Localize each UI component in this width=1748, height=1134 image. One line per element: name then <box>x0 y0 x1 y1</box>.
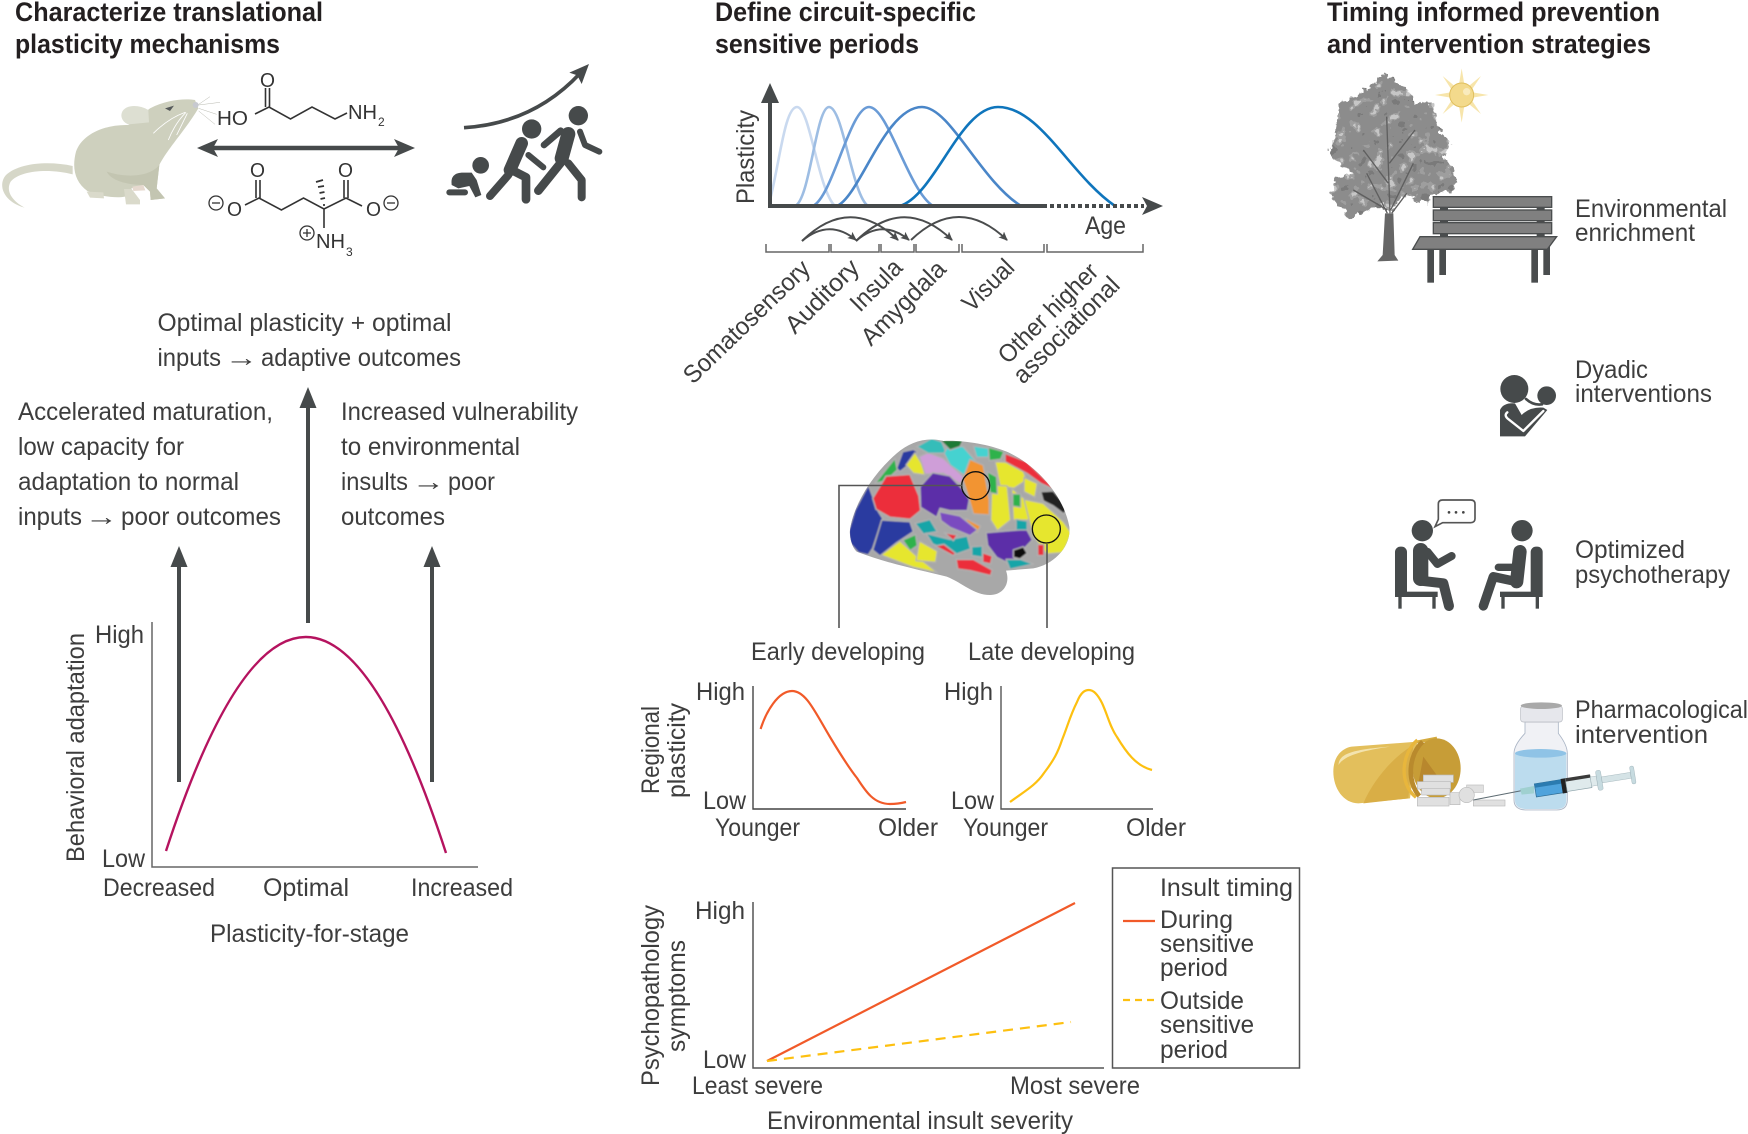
molecule: glutamate analogue: O <box>227 199 242 221</box>
molecule: glutamate analogue: 3 <box>346 245 353 259</box>
text: increased vulnerability outcome: to environmental <box>341 433 520 461</box>
chart: early developing regional plasticity <box>637 678 938 842</box>
heading: define circuit-specific sensitive periods <box>715 0 976 59</box>
text: optimal plasticity outcome <box>158 309 461 372</box>
heading: characterize translational plasticity mechanisms <box>15 0 323 59</box>
text: accelerated maturation outcome <box>18 398 281 531</box>
heading: characterize translational plasticity mechanisms: plasticity mechanisms <box>15 29 280 59</box>
legend: insult timing: period <box>1160 954 1228 982</box>
labels: brain regions: associational <box>1007 271 1126 389</box>
chart: late developing regional plasticity: Older <box>1126 814 1186 842</box>
text: increased vulnerability outcome: poor <box>448 468 495 496</box>
label: dyadic interventions: interventions <box>1575 380 1712 408</box>
chart: behavioral adaptation inverted U: Optimal <box>263 874 349 902</box>
label: late developing: Late developing <box>968 638 1135 666</box>
chart: behavioral adaptation inverted U: Decreased <box>103 874 215 902</box>
text: increased vulnerability outcome: insults <box>341 468 408 496</box>
molecule: glutamate analogue: O <box>366 199 381 221</box>
chart: psychopathology vs insult severity: High <box>695 897 745 925</box>
leader lines: early and late regions <box>839 486 1047 628</box>
chart: behavioral adaptation inverted U: Plasticity-for-stage <box>210 920 409 948</box>
molecule: GABA: 2 <box>378 115 385 129</box>
icon: mouse <box>2 97 220 208</box>
text: optimal plasticity outcome: inputs <box>158 344 221 372</box>
chart: plasticity curves by age <box>732 83 1163 240</box>
text: optimal plasticity outcome: Optimal plasticity + optimal <box>158 309 452 337</box>
labels: brain regions <box>678 253 1126 389</box>
chart: psychopathology vs insult severity: Psychopathology <box>637 905 665 1086</box>
chart: early developing regional plasticity: Regional <box>637 706 665 794</box>
chart: plasticity curves by age: Age <box>1085 212 1126 240</box>
text: accelerated maturation outcome: low capacity for <box>18 433 184 461</box>
chart: early developing regional plasticity: Younger <box>715 814 800 842</box>
labels: brain regions: Visual <box>956 254 1020 317</box>
brackets: region spans <box>766 244 1143 252</box>
chart: behavioral adaptation inverted U: Low <box>102 845 146 873</box>
labels: brain regions: Amygdala <box>855 255 952 351</box>
labels: brain regions: Other higher <box>992 258 1104 369</box>
arrows: maturation sequence <box>802 217 1007 241</box>
text: accelerated maturation outcome: adaptation to normal <box>18 468 239 496</box>
icon: pills, vial and syringe <box>1333 702 1636 810</box>
chart: late developing regional plasticity: Younger <box>963 814 1048 842</box>
text: increased vulnerability outcome: outcomes <box>341 503 445 531</box>
legend: insult timing: Insult timing <box>1160 874 1293 902</box>
arrow: centre upward <box>300 387 316 623</box>
heading: timing informed prevention and intervention strategies: and intervention strategies <box>1327 29 1651 59</box>
text: accelerated maturation outcome: poor outcomes <box>121 503 281 531</box>
chart: early developing regional plasticity: Low <box>703 787 747 815</box>
label: pharmacological intervention: intervention <box>1575 721 1708 749</box>
arrow: right upward <box>424 546 440 782</box>
chart: late developing regional plasticity: High <box>944 678 993 706</box>
panel: timing informed strategies <box>1327 0 1748 810</box>
panel: translational plasticity mechanisms <box>2 0 599 948</box>
molecule: glutamate analogue <box>209 160 398 259</box>
labels: brain regions: Insula <box>844 254 908 317</box>
legend: insult timing: sensitive <box>1160 930 1254 958</box>
text: increased vulnerability outcome: → <box>412 468 445 496</box>
chart: psychopathology vs insult severity <box>637 897 1140 1134</box>
legend: insult timing: sensitive <box>1160 1011 1254 1039</box>
chart: late developing regional plasticity: Low <box>951 787 995 815</box>
label: dyadic interventions: Dyadic <box>1575 356 1648 384</box>
legend: insult timing: During <box>1160 906 1233 934</box>
panel: circuit-specific sensitive periods <box>637 0 1300 1134</box>
labels: brain regions: Auditory <box>779 253 865 339</box>
molecule: glutamate analogue: NH <box>316 231 345 253</box>
label: early developing: Early developing <box>751 638 925 666</box>
icon: therapist and patient <box>1395 500 1543 609</box>
text: optimal plasticity outcome: adaptive outcomes <box>261 344 461 372</box>
icon: parent and child <box>1500 375 1556 436</box>
text: optimal plasticity outcome: → <box>225 344 258 372</box>
chart: plasticity curves by age: Plasticity <box>732 110 760 204</box>
chart: early developing regional plasticity: plasticity <box>663 703 691 798</box>
chart: early developing regional plasticity: Older <box>878 814 938 842</box>
icon: tree, sun and bench <box>1331 68 1557 283</box>
label: optimized psychotherapy: Optimized <box>1575 536 1685 564</box>
icon: growing children with rising arrow <box>449 64 599 199</box>
image: parcellated brain <box>848 438 1072 595</box>
heading: define circuit-specific sensitive periods: sensitive periods <box>715 29 919 59</box>
molecule: GABA <box>217 70 385 130</box>
molecule: GABA: O <box>260 70 275 92</box>
text: accelerated maturation outcome: → <box>85 503 118 531</box>
chart: early developing regional plasticity: High <box>696 678 745 706</box>
molecule: glutamate analogue: O <box>250 160 265 182</box>
legend: insult timing: period <box>1160 1036 1228 1064</box>
heading: timing informed prevention and intervention strategies <box>1327 0 1660 59</box>
text: increased vulnerability outcome: Increased vulnerability <box>341 398 578 426</box>
label: dyadic interventions <box>1575 356 1712 408</box>
label: environmental enrichment <box>1575 195 1727 247</box>
chart: late developing regional plasticity <box>944 678 1186 842</box>
chart: psychopathology vs insult severity: Low <box>703 1046 747 1074</box>
molecule: GABA: NH <box>348 102 377 124</box>
molecule: glutamate analogue: O <box>338 160 353 182</box>
chart: psychopathology vs insult severity: symptoms <box>663 940 691 1052</box>
text: accelerated maturation outcome: inputs <box>18 503 82 531</box>
chart: psychopathology vs insult severity: Most severe <box>1010 1072 1140 1100</box>
molecule: GABA: HO <box>217 108 248 130</box>
labels: brain regions: Somatosensory <box>678 254 816 389</box>
double-headed arrow <box>197 139 415 157</box>
label: environmental enrichment: enrichment <box>1575 219 1695 247</box>
chart: behavioral adaptation inverted U: Increased <box>411 874 513 902</box>
label: optimized psychotherapy: psychotherapy <box>1575 561 1730 589</box>
chart: behavioral adaptation inverted U <box>62 621 513 948</box>
chart: behavioral adaptation inverted U: High <box>95 621 144 649</box>
chart: psychopathology vs insult severity: Least severe <box>692 1072 823 1100</box>
label: environmental enrichment: Environmental <box>1575 195 1727 223</box>
legend: insult timing <box>1112 868 1300 1068</box>
chart: behavioral adaptation inverted U: Behavioral adaptation <box>62 633 90 862</box>
text: accelerated maturation outcome: Accelerated maturation, <box>18 398 273 426</box>
text: increased vulnerability outcome <box>341 398 578 531</box>
arrow: left upward <box>170 546 188 782</box>
label: pharmacological intervention <box>1575 696 1748 749</box>
legend: insult timing: Outside <box>1160 987 1244 1015</box>
label: optimized psychotherapy <box>1575 536 1730 589</box>
